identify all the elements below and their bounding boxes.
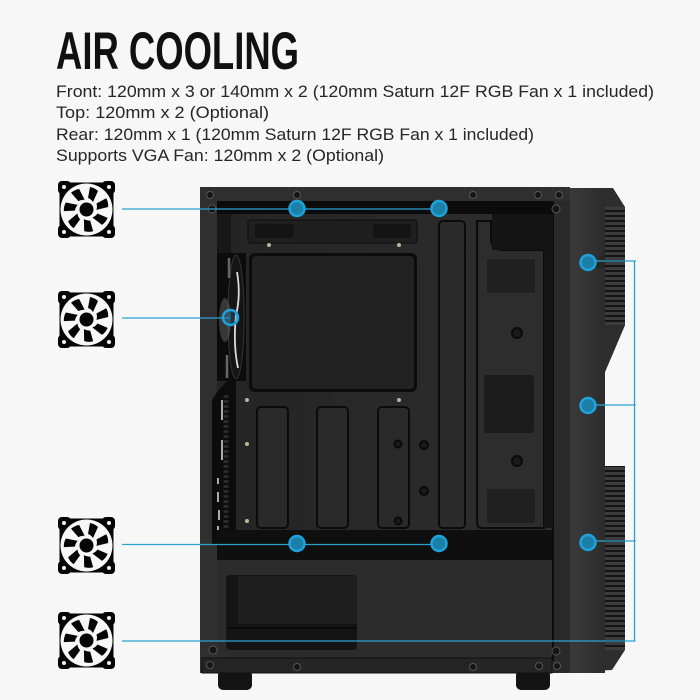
icon: fan front [58,612,115,669]
frame screws [206,192,562,670]
top black bar [217,201,552,214]
top mounting recess [248,220,417,243]
specification text block: Supports VGA Fan: 120mm x 2 (Optional) [56,146,384,165]
icon: fan rear [58,291,115,348]
screw points [245,243,402,523]
icon: fan top [58,181,115,238]
right frame rail [553,201,570,673]
case frame [200,187,570,673]
fan locator dots [223,201,596,551]
specification text block [56,82,654,165]
specification text block: Front: 120mm x 3 or 140mm x 2 (120mm Saturn 12F RGB Fan x 1 included) [56,82,654,101]
PC case [200,187,625,690]
specification text block: Rear: 120mm x 1 (120mm Saturn 12F RGB Fan x 1 included) [56,125,534,144]
vertical slot [439,221,465,528]
bottom black bar [217,530,552,560]
bottom strip [202,658,552,673]
motherboard cutout panel [249,253,417,392]
case feet [218,670,550,690]
icon: fan bottom [58,517,115,574]
connector lines [122,209,636,641]
cable bundle [212,380,236,545]
right cable panel [477,214,553,528]
PSU shroud [218,560,552,660]
specification text block: Top: 120mm x 2 (Optional) [56,103,269,122]
standoffs [394,440,428,524]
front panel [555,188,625,673]
rear fan [217,253,246,381]
left dark recess [217,214,231,254]
expansion bays [257,407,409,528]
interior tray [217,201,553,559]
title: AIR COOLING [56,22,299,81]
